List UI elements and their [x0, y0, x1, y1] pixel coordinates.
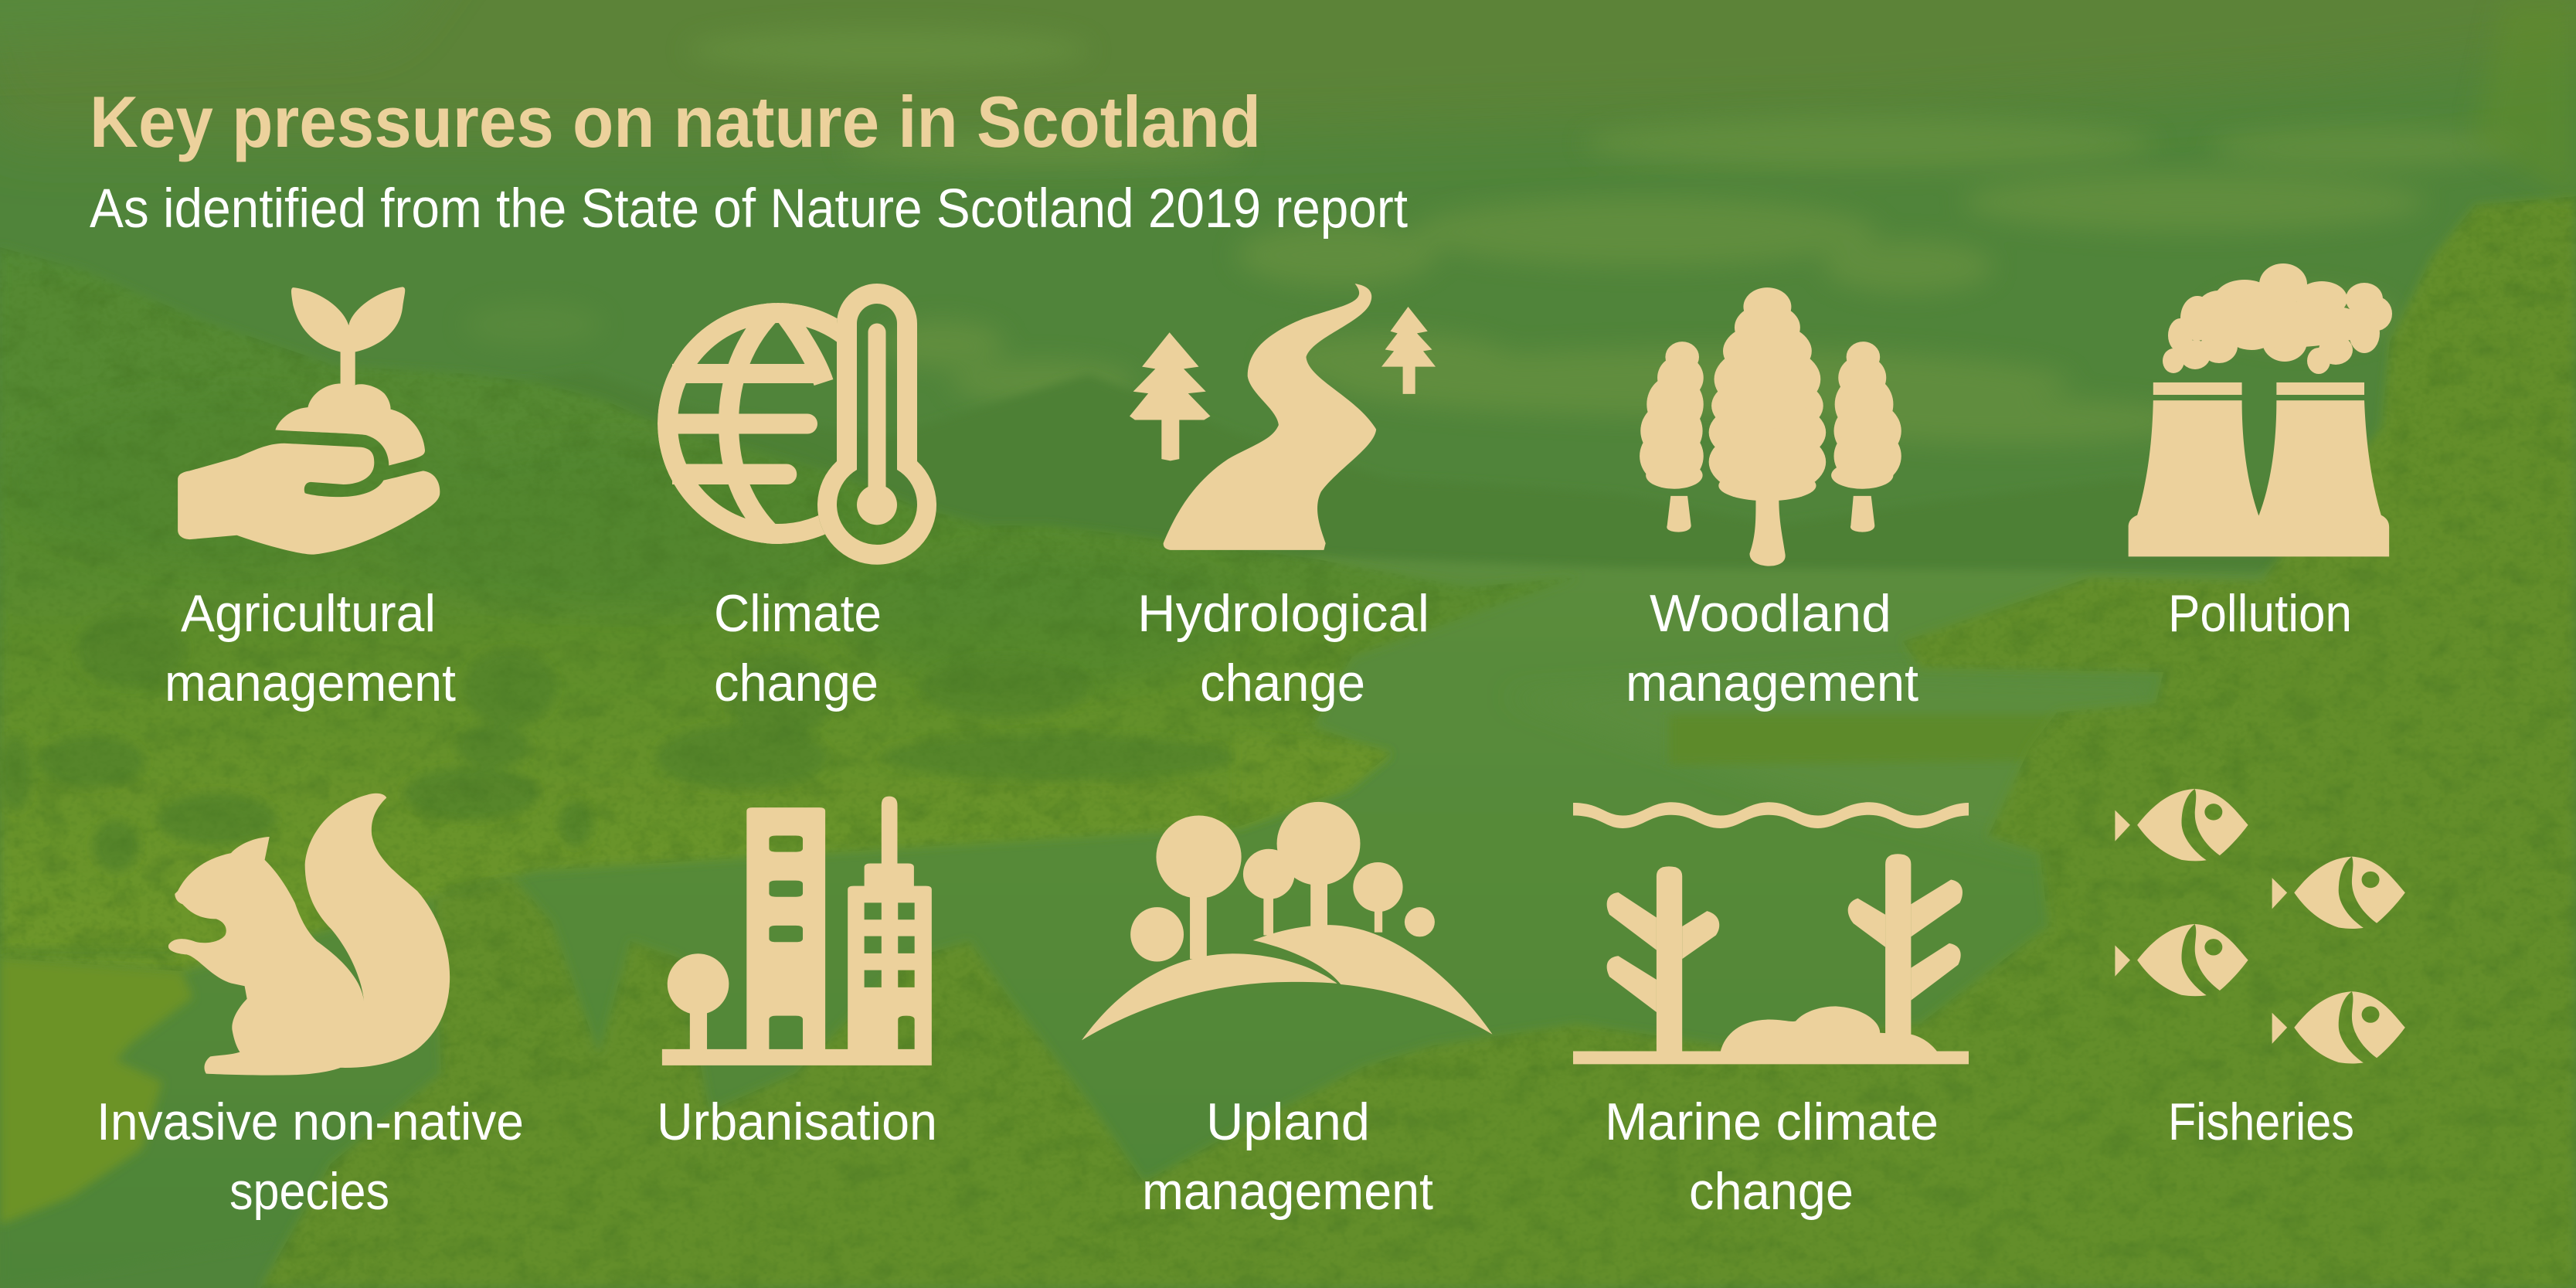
label: urbanisation: Urbanisation — [657, 1093, 937, 1151]
title: Key pressures on nature in Scotland — [90, 81, 1261, 162]
icon: marine climate change, seaweed under waves — [1573, 802, 1969, 1064]
label: invasive non-native species — [97, 1093, 524, 1221]
label: upland management: Upland — [1206, 1093, 1370, 1151]
label: woodland management: management — [1626, 654, 1918, 712]
icon: invasive non-native species, squirrel — [168, 794, 450, 1076]
label: climate change — [714, 584, 882, 712]
distant cloud near left hill — [464, 303, 603, 346]
label: agricultural management: Agricultural — [181, 584, 436, 643]
label: agricultural management — [165, 584, 456, 712]
icon: woodland management, three poplar trees — [1640, 287, 1901, 566]
icon: pollution, cooling towers and smoke — [2129, 263, 2392, 556]
icon: hydrological change, river and trees — [1130, 284, 1436, 550]
label: invasive non-native species: species — [229, 1162, 389, 1221]
label: marine climate change: Marine climate — [1605, 1093, 1939, 1151]
label: pollution: Pollution — [2168, 584, 2352, 643]
icon: upland management, hills with trees — [1082, 802, 1493, 1040]
label: fisheries: Fisheries — [2168, 1093, 2354, 1151]
label: invasive non-native species: Invasive non-native — [97, 1093, 524, 1151]
icon: agricultural management, hand holding seedling — [178, 287, 440, 555]
icon: urbanisation, buildings and tree — [662, 797, 932, 1065]
icon: fisheries, four fish — [2115, 789, 2405, 1064]
label: hydrological change — [1137, 584, 1429, 712]
label: marine climate change: change — [1689, 1162, 1854, 1221]
label: hydrological change: Hydrological — [1137, 584, 1429, 643]
subtitle: As identified from the State of Nature Scotland 2019 report — [90, 178, 1408, 240]
label: climate change: Climate — [714, 584, 882, 643]
label: woodland management — [1626, 584, 1918, 712]
label: upland management: management — [1142, 1162, 1433, 1221]
label: woodland management: Woodland — [1650, 584, 1891, 643]
icon: climate change, globe and thermometer — [666, 284, 936, 565]
label: climate change: change — [714, 654, 878, 712]
label: hydrological change: change — [1200, 654, 1365, 712]
label: upland management — [1142, 1093, 1433, 1221]
label: agricultural management: management — [165, 654, 456, 712]
label: marine climate change — [1605, 1093, 1939, 1221]
